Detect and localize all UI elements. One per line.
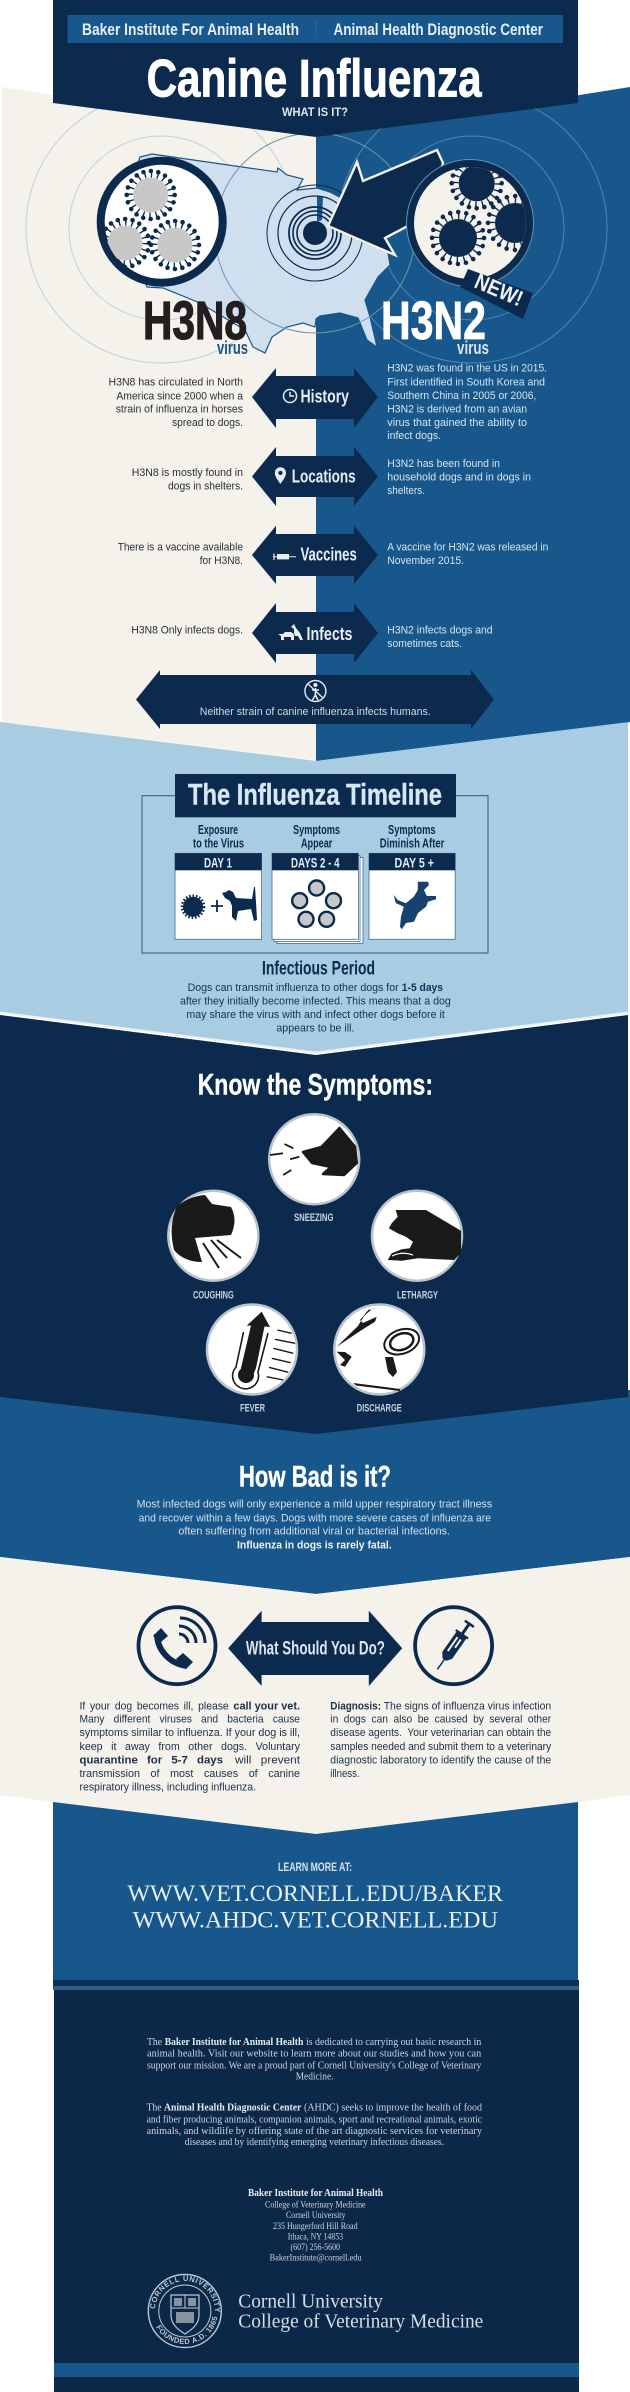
text: AHDC description: animals, and wildlife by offering state of the art diagnostic services for veterinary — [147, 2126, 483, 2137]
subtitle: WHAT IS IT? — [282, 105, 348, 119]
timeline column headings: to the Virus — [193, 837, 244, 851]
comparison text: H3N2 infects — [387, 625, 493, 650]
big faint target rings — [26, 93, 607, 363]
arrow: History — [252, 368, 378, 428]
text: Baker Institute description: The — [147, 2037, 162, 2048]
card: day 5+ — [369, 853, 455, 939]
text: Baker Institute description: Medicine. — [296, 2072, 334, 2083]
link: AHDC website: WWW.AHDC.VET.CORNELL.EDU — [133, 1908, 498, 1933]
icon: H3N2 virus circle — [406, 158, 542, 286]
comparison text: history: America since 2000 when a — [116, 390, 244, 402]
heading: H3N2 virus: H3N2 — [381, 291, 486, 351]
comparison text: H3N2 history: First identified in South Korea and — [387, 376, 545, 388]
arrow pointing to the US — [328, 150, 443, 255]
symptom: fever — [207, 1304, 297, 1415]
icon: dog — [222, 887, 257, 921]
text: contact address: Baker Institute for Animal Health — [248, 2188, 383, 2199]
symptom: lethargy — [372, 1191, 462, 1301]
timeline column headings: Appear — [301, 837, 332, 851]
text: call your vet: respiratory illness, including influenza. — [80, 1781, 256, 1793]
text: learn more at: LEARN MORE AT: — [278, 1860, 352, 1874]
text: AHDC description: diseases and by identifying emerging veterinary infectious diseases. — [185, 2137, 444, 2148]
logo: Cornell University seal: CORNELL UNIVERSITY — [150, 2276, 220, 2312]
arrow: what should you do: What Should You Do? — [246, 1638, 385, 1660]
text: how bad — [137, 1499, 492, 1551]
text: call your vet: quarantine for 5-7 days — [80, 1754, 223, 1766]
comparison text: H3N2 history: infect dogs. — [387, 430, 441, 442]
arrow: Locations — [252, 447, 378, 506]
comparison text: H3N2 history: Southern China in 2005 or 2006, — [387, 390, 536, 402]
organisation names — [82, 20, 543, 39]
comparison text: history: spread to dogs. — [172, 417, 243, 429]
heading: H3N8 virus: virus — [217, 338, 248, 358]
comparison text: H3N2 history: virus that gained the ability to — [387, 417, 527, 429]
arrow: what should you do — [228, 1611, 402, 1686]
symptom: discharge — [334, 1304, 424, 1415]
arrow: humans note — [136, 670, 494, 729]
comparison text: H3N2 locations: H3N2 has been found in — [387, 458, 500, 470]
symptom: sneezing — [269, 1114, 359, 1224]
panel: timeline background — [0, 722, 628, 1052]
heading: H3N8 virus — [143, 291, 248, 358]
arrow: Infects: Infects — [306, 624, 352, 644]
text: contact address: 235 Hungerford Hill Road — [273, 2221, 358, 2232]
icon: jumping dog — [394, 882, 436, 929]
text: contact address: (607) 256-5600 — [290, 2242, 340, 2253]
comparison text: H3N8 infects: H3N8 Only infects dogs. — [131, 624, 243, 636]
link: Baker Institute website: WWW.VET.CORNELL.EDU/BAKER — [127, 1881, 504, 1906]
card: day 5+: DAY 5 + — [394, 854, 434, 870]
logo: Cornell University seal: FOUNDED A.D. 1865 — [156, 2316, 218, 2344]
comparison text: H3N8 vaccines — [118, 542, 243, 567]
panel: footer — [53, 1980, 579, 2392]
arrow: History: History — [300, 387, 349, 407]
comparison text: H3N8 vaccines: There is a vaccine available — [118, 542, 243, 554]
arrow: Vaccines: Vaccines — [300, 545, 357, 565]
text: how bad: often suffering from additional viral or bacterial infections. — [178, 1526, 450, 1538]
text: contact address: Cornell University — [286, 2211, 346, 2221]
text: infectious period: appears to be ill. — [276, 1023, 354, 1035]
comparison text: H3N8 locations: dogs in shelters. — [168, 480, 243, 492]
map of the United States — [120, 154, 390, 353]
logo: Cornell University seal — [148, 2274, 222, 2348]
panel: what is it (two-tone background) — [2, 87, 630, 761]
text: diagnosis: samples needed and submit them to a veterinary — [330, 1741, 551, 1753]
timeline frame — [142, 796, 488, 953]
text: Baker Institute description: support our mission. We are a proud part of Cornell University's College of Veterinary — [147, 2060, 482, 2071]
text: how bad: Most infected dogs will only experience a mild upper respiratory tract illness — [137, 1499, 492, 1511]
text: call your vet: call your vet. — [233, 1700, 300, 1712]
icon: plus — [211, 900, 223, 912]
logo text: Cornell University College of Veterinary Medicine: Cornell University — [238, 2290, 383, 2312]
comparison text: history: H3N8 has circulated in North — [108, 377, 243, 389]
text: Baker Institute description — [147, 2037, 482, 2083]
organisation names: Baker Institute For Animal Health — [82, 20, 299, 39]
comparison text: H3N8 vaccines: for H3N8. — [200, 555, 243, 567]
text: diagnosis: in dogs can also be caused by several other — [330, 1714, 551, 1726]
text: Baker Institute description: animal health. Visit our website to learn more about our studies and how you can — [147, 2049, 482, 2060]
NEW! ribbon: NEW! — [471, 269, 527, 311]
timeline column headings — [193, 823, 444, 851]
symptom: discharge: DISCHARGE — [357, 1403, 402, 1415]
text: how bad: Influenza in dogs is rarely fatal. — [237, 1539, 392, 1551]
timeline column headings: Symptoms — [388, 823, 436, 837]
card: day 1 — [175, 853, 262, 939]
mid ring — [215, 133, 415, 333]
comparison text: H3N2 locations — [387, 458, 531, 497]
timeline column headings: Diminish After — [380, 837, 444, 851]
text: infectious period: after they initially become infected. This means that a dog — [180, 995, 451, 1007]
text: diagnosis: illness. — [330, 1768, 360, 1780]
text: diagnosis: diagnostic laboratory to identify the cause of the — [330, 1754, 551, 1766]
text: diagnosis — [330, 1700, 551, 1780]
text: call your vet: keep it away from other dogs. Voluntary — [80, 1741, 300, 1753]
logo text: Cornell University College of Veterinary Medicine: College of Veterinary Medicine — [238, 2310, 483, 2332]
text: contact address — [248, 2188, 383, 2264]
panel: how bad is it — [0, 1390, 630, 1594]
arrow: Infects — [252, 603, 378, 663]
text: infectious period: Dogs can transmit influenza to other dogs for — [188, 982, 402, 994]
text: how bad: and recover within a few days. Dogs with more severe cases of influenza are — [139, 1512, 491, 1524]
icon: virus — [182, 896, 204, 918]
comparison text: H3N2 history: H3N2 is derived from an avian — [387, 404, 527, 416]
comparison text: history: strain of influenza in horses — [116, 404, 243, 416]
comparison text: H3N2 history: H3N2 was found in the US in 2015. — [387, 363, 547, 375]
panel: know the symptoms — [0, 1015, 628, 1434]
text: call your vet: transmission of most causes of canine — [80, 1768, 300, 1780]
text: call your vet: symptoms similar to influenza. If your dog is ill, — [80, 1727, 300, 1739]
title: Canine Influenza — [147, 50, 482, 108]
icon: clock — [284, 390, 296, 402]
text: Baker Institute description: Baker Institute for Animal Health — [165, 2037, 303, 2048]
comparison text: H3N2 vaccines: November 2015. — [387, 555, 464, 567]
header banner — [53, 0, 578, 137]
card: days 2-4: DAYS 2 - 4 — [291, 854, 340, 870]
comparison text: H3N2 infects: sometimes cats. — [387, 638, 462, 650]
panel: learn more — [53, 1802, 578, 1980]
text: infectious period: may share the virus with and infect other dogs before it — [186, 1009, 446, 1021]
card: day 1: DAY 1 — [204, 854, 232, 870]
card: days 2-4 — [272, 853, 363, 944]
outbreak target rings — [267, 185, 363, 281]
symptom: coughing — [168, 1191, 258, 1301]
comparison text: H3N8 locations — [132, 467, 243, 492]
icon: no humans — [305, 680, 326, 702]
text: call your vet: If your dog becomes ill, please — [80, 1700, 233, 1712]
comparison text: H3N2 infects: H3N2 infects dogs and — [387, 625, 493, 637]
comparison text: H3N8 locations: H3N8 is mostly found in — [132, 467, 243, 479]
symptom: coughing: COUGHING — [193, 1289, 234, 1301]
text: AHDC description: and fiber producing animals, companion animals, sport and recreational animals, exotic — [147, 2114, 482, 2125]
arrow: Vaccines — [252, 526, 378, 584]
text: diagnosis: Diagnosis: — [330, 1700, 381, 1712]
heading: infectious period: Infectious Period — [262, 958, 375, 979]
symptom: lethargy: LETHARGY — [397, 1289, 438, 1301]
text: AHDC description: (AHDC) seeks to improve the health of food — [304, 2103, 483, 2114]
icon: map pin — [275, 467, 286, 484]
organisation names: Animal Health Diagnostic Center — [334, 20, 543, 39]
text: contact address: College of Veterinary Medicine — [265, 2199, 366, 2210]
heading: H3N8 virus: H3N8 — [143, 291, 247, 351]
icon: syringe — [415, 1607, 492, 1684]
icon: cat and dog — [278, 624, 303, 640]
text: AHDC description: Animal Health Diagnostic Center — [164, 2103, 302, 2114]
symptom: fever: FEVER — [240, 1403, 265, 1415]
icon: small syringe — [273, 554, 296, 560]
heading: know the symptoms: Know the Symptoms: — [198, 1068, 433, 1101]
timeline title: The Influenza Timeline — [188, 778, 442, 811]
text: contact address: BakerInstitute@cornell.edu — [270, 2254, 362, 2264]
comparison text: H3N2 vaccines: A vaccine for H3N2 was released in — [387, 542, 548, 554]
text: call your vet: will prevent — [234, 1754, 301, 1766]
text: Baker Institute description: is dedicated to carrying out basic research in — [306, 2037, 482, 2048]
text: infectious period: 1-5 days — [402, 982, 443, 994]
panel: what should you do — [0, 1557, 630, 1834]
text: call your vet — [80, 1700, 301, 1793]
text: AHDC description — [147, 2103, 483, 2148]
arrow: Locations: Locations — [292, 467, 356, 487]
icon: five virus particles — [292, 880, 341, 927]
icon: H3N8 virus circle — [101, 161, 223, 283]
icon: phone — [138, 1607, 216, 1684]
heading: H3N2 virus: virus — [457, 338, 489, 358]
text: diagnosis: disease agents. Your veterinarian can obtain the — [330, 1727, 551, 1739]
logo text: Cornell University College of Veterinary Medicine — [238, 2290, 483, 2332]
text: diagnosis: The signs of influenza virus infection — [384, 1700, 551, 1712]
timeline title — [175, 774, 456, 817]
comparison text: H3N2 locations: shelters. — [387, 485, 425, 497]
symptom: sneezing: SNEEZING — [294, 1212, 334, 1224]
timeline column headings: Exposure — [198, 823, 238, 837]
comparison text: H3N2 vaccines — [387, 542, 548, 567]
heading: how bad is it: How Bad is it? — [239, 1461, 391, 1494]
text: contact address: Ithaca, NY 14853 — [288, 2233, 343, 2243]
comparison text: H3N2 history — [387, 363, 547, 442]
comparison text: history — [108, 377, 244, 429]
text: AHDC description: The — [147, 2103, 162, 2114]
arrow: humans note: Neither strain of canine influenza infects humans. — [200, 706, 431, 718]
timeline column headings: Symptoms — [293, 823, 340, 837]
text: infectious period — [180, 982, 451, 1035]
text: call your vet: Many different viruses and bacteria cause — [80, 1714, 300, 1726]
comparison text: H3N2 locations: household dogs and in dogs in — [387, 471, 531, 483]
